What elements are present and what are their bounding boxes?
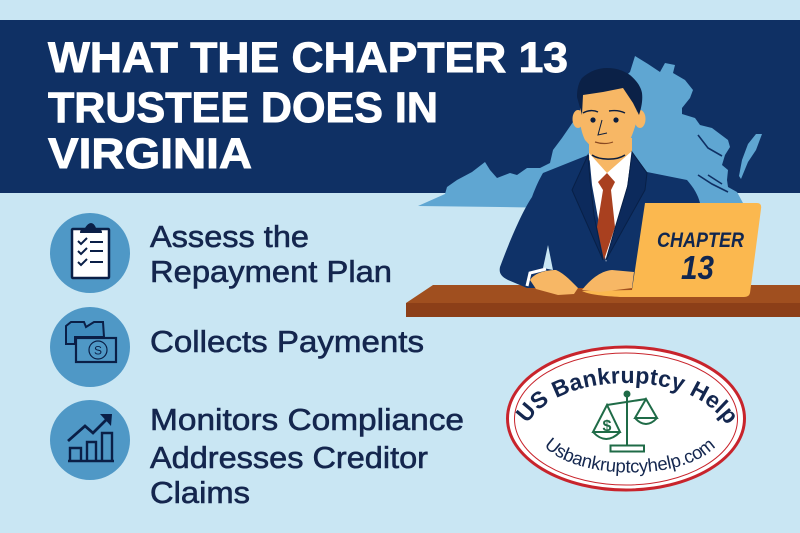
- mouth: [595, 142, 613, 144]
- icon: banknotes: [50, 307, 130, 387]
- neck: [589, 138, 632, 175]
- item: collects payments: [50, 307, 424, 387]
- label: Monitors Compliance: [150, 402, 464, 437]
- necktie: [597, 173, 615, 260]
- label: [150, 219, 392, 289]
- map: eastern shore: [739, 134, 762, 179]
- eyes and brows: [590, 117, 596, 123]
- gap between arm and torso: [543, 245, 553, 270]
- icon: banknotes: S: [94, 344, 102, 358]
- logo name: US Bankruptcy Help: [516, 368, 735, 423]
- logo url: Usbankruptcyhelp.com: [546, 437, 716, 476]
- hair: [577, 68, 642, 115]
- label: Addresses Creditor: [150, 440, 428, 475]
- desk: [406, 285, 800, 317]
- title: TRUSTEE DOES IN: [48, 84, 438, 132]
- map: Virginia: [418, 56, 762, 208]
- title: [48, 34, 568, 178]
- item: assess the repayment plan: [50, 213, 392, 293]
- person: trustee: [500, 68, 704, 295]
- logo: US Bankruptcy Help: [506, 346, 746, 492]
- label: Collects Payments: [150, 324, 424, 359]
- icon: scales of justice: $: [603, 418, 612, 435]
- item: monitors compliance and creditor claims: [50, 400, 464, 510]
- nose: [598, 120, 607, 135]
- laptop: [582, 203, 761, 297]
- lapels: [572, 152, 647, 260]
- right hand: [582, 270, 634, 292]
- icon: growth chart: [50, 400, 130, 480]
- label: Claims: [150, 475, 250, 510]
- icon: clipboard checklist: [50, 213, 130, 293]
- shirt: [589, 151, 632, 262]
- face: [580, 80, 637, 156]
- ears: [572, 110, 584, 128]
- laptop label: CHAPTER: [657, 229, 745, 252]
- left hand: [530, 270, 578, 295]
- shirt cuff: [527, 269, 546, 286]
- icon: scales of justice: [593, 392, 657, 452]
- label: Assess the: [150, 219, 309, 254]
- header banner: [0, 20, 800, 193]
- neck shadow line: [592, 155, 625, 159]
- label: Repayment Plan: [150, 254, 392, 289]
- title: WHAT THE CHAPTER 13: [48, 34, 568, 82]
- title: VIRGINIA: [48, 130, 252, 178]
- laptop: 13: [681, 249, 714, 286]
- jacket: [500, 152, 704, 288]
- label: [150, 402, 464, 510]
